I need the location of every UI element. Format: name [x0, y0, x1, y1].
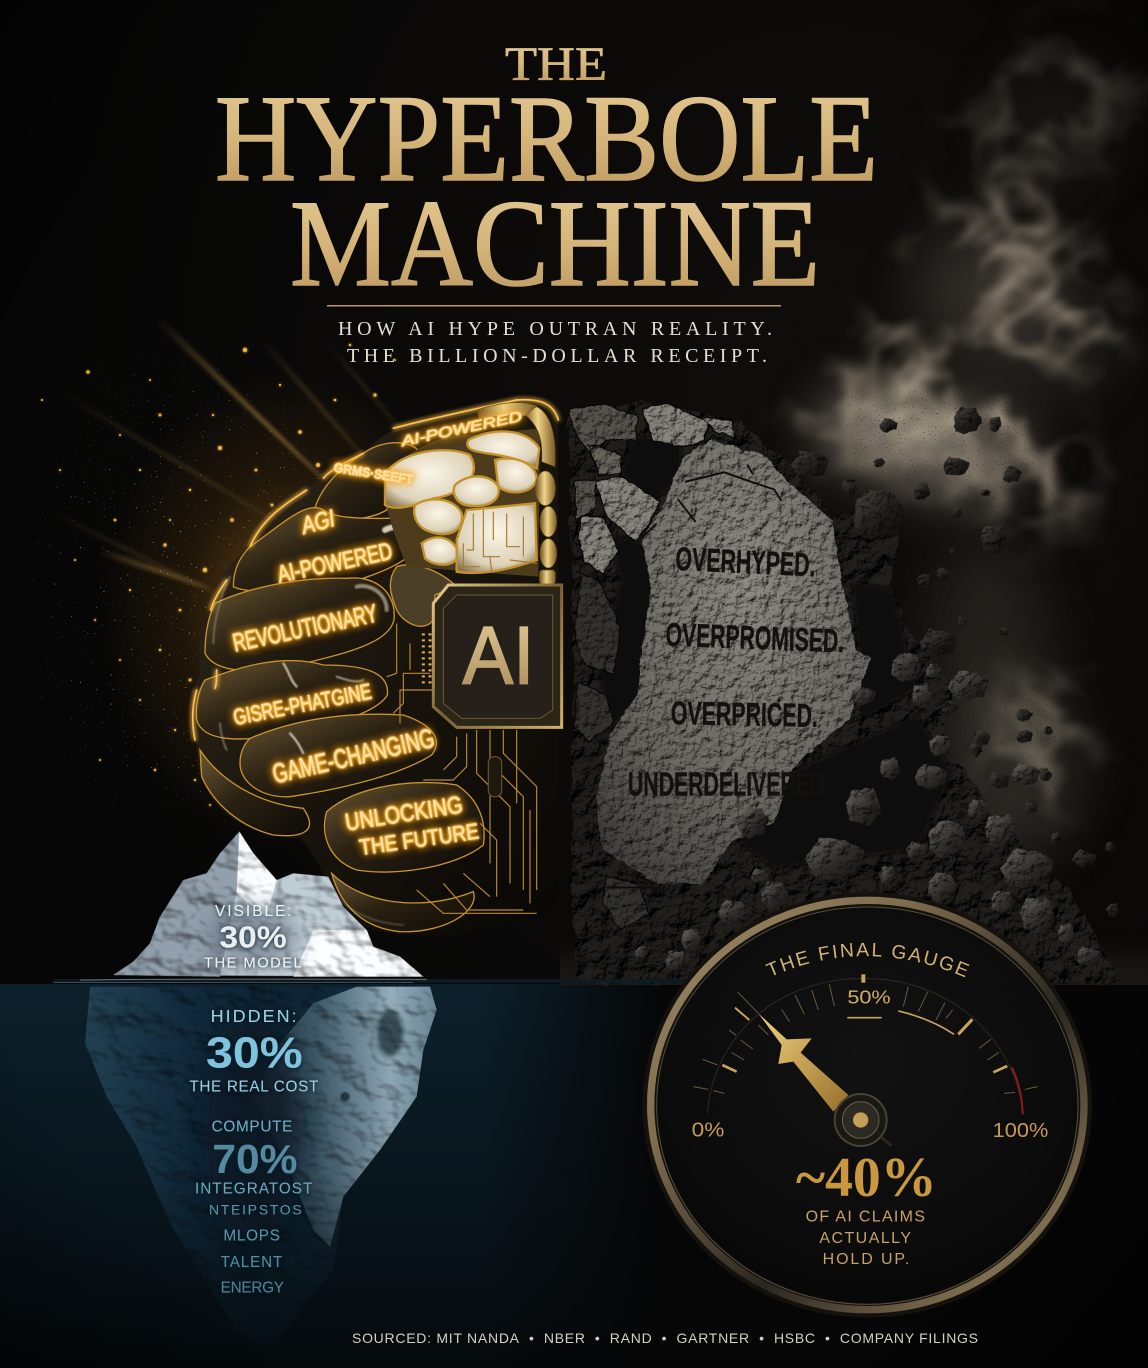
scale label 0: 0% — [692, 1120, 725, 1142]
final gauge: THE FINAL GAUGE — [765, 942, 970, 978]
integration: INTEGRATOST — [195, 1181, 313, 1198]
word: revolutionary: REVOLUTIONARY — [230, 600, 380, 658]
scale ticks — [693, 974, 1037, 1114]
dark shadow crevices — [599, 436, 953, 868]
headline figure: ~40% — [796, 1147, 937, 1209]
title: the: THE — [505, 38, 607, 91]
visible block — [204, 903, 302, 971]
bright upper lobes — [385, 428, 540, 577]
dark folded lobes — [196, 443, 484, 932]
glossy highlights — [213, 527, 413, 925]
visible figure: 30% — [219, 920, 287, 954]
broken stone chunks — [569, 403, 735, 930]
caption line 3: HOLD UP. — [823, 1251, 909, 1268]
word: top AI-powered: AI-POWERED — [399, 408, 523, 449]
gold dust field — [0, 320, 380, 860]
hidden figure: 30% — [206, 1029, 303, 1078]
visible label: VISIBLE: — [215, 903, 292, 920]
word: garbled: GRMS·SEEFT — [333, 461, 414, 487]
gauge dial and ring — [645, 894, 1090, 1316]
word: AGI: AGI — [297, 505, 338, 540]
title — [215, 38, 878, 312]
gauge title — [770, 956, 965, 977]
lit rocks in pile — [636, 652, 1101, 970]
right half: crumbling stone — [567, 390, 1120, 983]
word: garbled game-changer: GISRE-PHATGINE — [231, 679, 373, 730]
compute label: COMPUTE — [212, 1118, 292, 1135]
dust speckles — [846, 390, 1096, 888]
gold beads along midline — [477, 403, 557, 584]
title: machine: MACHINE — [290, 175, 820, 312]
subtitle line 1: HOW AI HYPE OUTRAN REALITY. — [338, 318, 772, 340]
water surface — [0, 984, 1148, 1368]
caption line 2: ACTUALLY — [819, 1230, 911, 1247]
iceberg — [53, 832, 733, 1347]
gauge caption — [806, 1209, 925, 1268]
iceberg tip — [113, 832, 423, 977]
integration ghost: NTEIPSTOS — [209, 1202, 302, 1218]
golden light rays — [50, 318, 480, 850]
waterline — [53, 979, 733, 983]
visible caption: THE MODEL — [204, 955, 302, 971]
circuit traces on bright plate — [463, 510, 537, 572]
glowing hype words — [230, 408, 523, 860]
word: overpriced: OVERPRICED. — [671, 694, 818, 734]
glowing brain edge — [193, 400, 558, 740]
gold sparkles — [41, 344, 396, 806]
dark rock mass — [567, 401, 1120, 983]
energy: ENERGY — [221, 1279, 284, 1296]
scale label 50: 50% — [847, 987, 891, 1008]
left half: golden brain — [192, 400, 562, 936]
scale label 100: 100% — [993, 1120, 1049, 1142]
compute figure: 70% — [212, 1136, 297, 1182]
talent: TALENT — [221, 1254, 283, 1271]
chip label: AI — [463, 610, 534, 701]
caption line 1: OF AI CLAIMS — [806, 1209, 925, 1226]
word: underdelivered: UNDERDELIVERED. — [628, 766, 831, 803]
brain base — [192, 400, 558, 936]
final gauge — [642, 892, 1092, 1318]
word: overhyped: OVERHYPED. — [675, 540, 816, 584]
ground strip — [560, 930, 1148, 985]
flying debris — [791, 407, 1120, 917]
tablet cracks — [606, 465, 781, 888]
word: overpromised: OVERPROMISED. — [665, 616, 845, 660]
smoke cloud — [800, 20, 1145, 860]
iceberg underwater — [85, 987, 437, 1347]
AI chip — [433, 585, 562, 727]
needle hub — [835, 1094, 887, 1146]
word: game-changing: GAME-CHANGING — [270, 723, 437, 789]
cost list — [195, 1118, 313, 1296]
tablet engraved words — [628, 540, 845, 803]
word: the future: THE FUTURE — [358, 818, 480, 860]
word: unlocking: UNLOCKING — [343, 791, 464, 837]
source footer: SOURCED: MIT NANDA • NBER • RAND • GARTNER • HSBC • COMPANY FILINGS — [352, 1330, 978, 1346]
needle — [758, 1013, 892, 1146]
hidden caption: THE REAL COST — [189, 1078, 319, 1095]
subtitle — [338, 318, 772, 367]
mlops: MLOPS — [223, 1227, 280, 1244]
hidden block — [189, 1006, 319, 1095]
circuit traces below chip — [387, 623, 545, 913]
stone tablet — [596, 440, 871, 884]
hidden label: HIDDEN: — [211, 1006, 297, 1026]
word: AI-powered: AI-POWERED — [275, 538, 395, 589]
subtitle line 2: THE BILLION-DOLLAR RECEIPT. — [347, 345, 767, 367]
title: hyperbole: HYPERBOLE — [215, 70, 878, 207]
